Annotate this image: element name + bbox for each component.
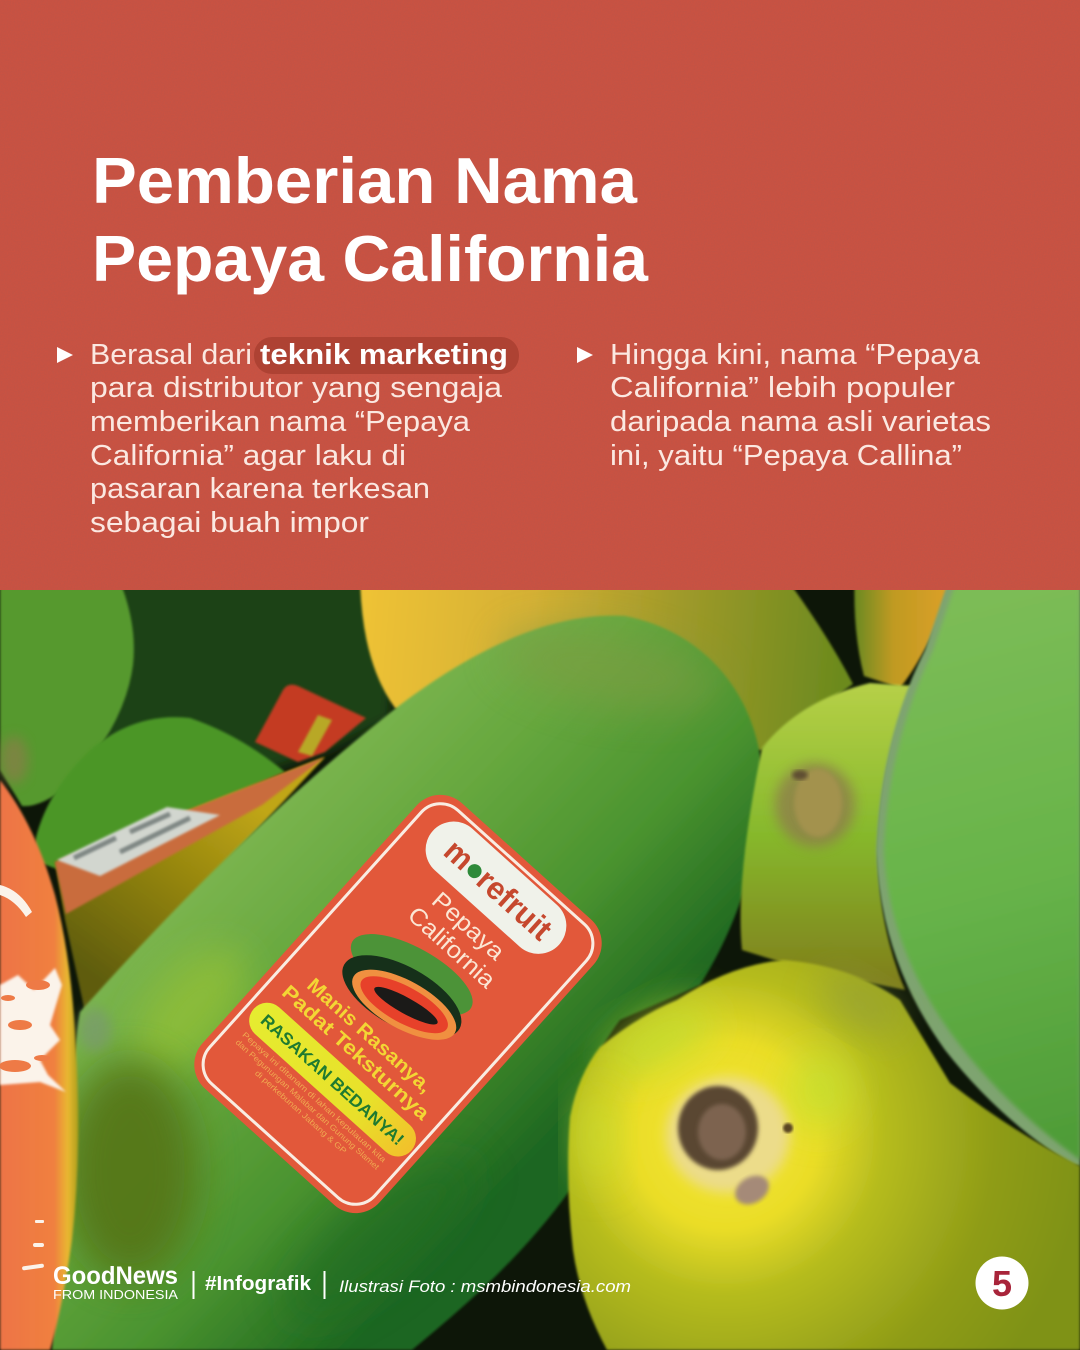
- page number badge: [976, 1256, 1028, 1310]
- fruit: bottom-right yellow papaya: [568, 960, 1080, 1350]
- sticker logo pill: m: [437, 832, 481, 877]
- fruit: middle-right papaya with stem: [741, 683, 915, 990]
- left bullet text: sebagai buah impor: [90, 507, 369, 539]
- right bullet text: Hingga kini, nama “Pepaya: [610, 339, 981, 371]
- fruit: orange box papaya with barcode: [55, 757, 325, 1012]
- flesh flecks: [0, 885, 66, 1271]
- fruit: cut orange papaya: [0, 780, 78, 1350]
- left bullet text: para distributor yang sengaja: [90, 372, 503, 404]
- title: [92, 144, 649, 295]
- sticker tagline: Manis Rasanya,: [302, 974, 436, 1098]
- title: Pepaya California: [92, 222, 649, 295]
- stem scar: [666, 1077, 793, 1210]
- left bullet text: [90, 339, 508, 539]
- barcode label: [57, 807, 220, 876]
- sticker: Pepaya California: [194, 794, 602, 1214]
- fruit: top-right yellow papaya: [852, 590, 948, 687]
- sticker tagline: Padat Teksturnya: [277, 981, 434, 1125]
- fruit: right big green papaya: [876, 570, 1080, 1166]
- footer: photo credit: Ilustrasi Foto : msmbindonesia.com: [339, 1277, 631, 1296]
- highlight pill behind marketing phrase: [254, 337, 519, 374]
- fruit: green papaya behind box: [32, 717, 285, 870]
- bullet column: right: [577, 339, 991, 472]
- left bullet text: teknik marketing: [260, 339, 508, 371]
- sticker product name: Pepaya: [426, 887, 510, 966]
- sticker product name: California: [402, 902, 501, 994]
- right bullet text: ini, yaitu “Pepaya Callina”: [610, 440, 962, 472]
- label: small red sticker: [255, 685, 366, 762]
- sticker fine print: di perkebunan Jabang & GP: [253, 1069, 348, 1156]
- left bullet text: pasaran karena terkesan: [90, 473, 430, 505]
- left bullet text: California” agar laku di: [90, 440, 406, 472]
- left bullet text: Berasal dari: [90, 339, 252, 371]
- title: Pemberian Nama: [92, 144, 638, 217]
- footer: brand logo: GoodNews: [53, 1262, 178, 1290]
- left bullet text: memberikan nama “Pepaya: [90, 406, 471, 438]
- icon: right bullet arrow: [577, 347, 593, 363]
- fruit: top-left green papaya: [0, 570, 134, 806]
- icon: left bullet arrow: [57, 347, 73, 363]
- photo: papayas: [0, 570, 1080, 1350]
- footer: hashtag: #Infografik: [205, 1273, 312, 1295]
- bullet column: left: [57, 337, 519, 539]
- right bullet text: daripada nama asli varietas: [610, 406, 991, 438]
- sticker fine print: dan Pegunungan Malabar dan Gunung Slamet: [234, 1038, 382, 1172]
- footer: brand logo: FROM INDONESIA: [53, 1287, 178, 1302]
- fruit: dark green back papaya: [106, 590, 394, 770]
- right bullet text: [610, 339, 991, 472]
- sticker yellow pill: RASAKAN BEDANYA!: [257, 1011, 408, 1149]
- footer: brand logo: [53, 1262, 178, 1302]
- page number badge: 5: [992, 1263, 1012, 1304]
- sticker logo pill: refruit: [470, 862, 560, 947]
- sticker logo pill: [426, 822, 566, 954]
- sticker fine print: Pepaya ini ditanam di lahan kepulauan kita: [240, 1030, 388, 1165]
- fruit: top yellow papaya: [358, 590, 854, 752]
- fruit: main green papaya: [52, 615, 762, 1350]
- sticker papaya image: [342, 934, 473, 1040]
- panel: red heading background: [0, 0, 1080, 590]
- right bullet text: California” lebih populer: [610, 372, 955, 404]
- orange flecks over the white patch: [0, 980, 50, 1072]
